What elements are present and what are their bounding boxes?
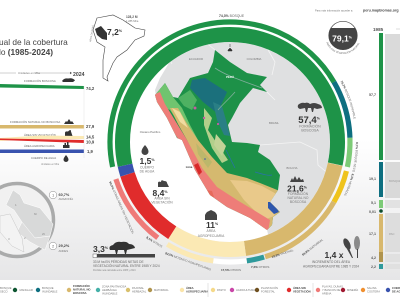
stat: bare area: VEGETACIÓN: [151, 200, 173, 204]
ring labels: 59,8% MATORRAL: [301, 238, 324, 257]
callout: andes: [49, 242, 70, 253]
callout: amazonia: AMAZONÍA: [58, 197, 73, 201]
ring labels: 90,0% OTRAS ÁREAS SIN VEGETACIÓN: [108, 180, 136, 234]
legend: BOSCOSA: [73, 291, 87, 295]
stat: forest formation: %: [317, 116, 321, 120]
legend: ZONA PANTANOSA: [102, 284, 126, 288]
ring labels: [108, 14, 358, 272]
title: [0, 37, 68, 57]
legend: INUNDABLE: [42, 290, 58, 294]
left line chart: [0, 71, 95, 166]
link note: peru.mapbiomas.org: [363, 8, 399, 12]
legend: PLAYAS, DUNAS: [322, 284, 343, 288]
callout: andes: 2: [52, 244, 55, 248]
stat: forest formation: BOSCOSA: [301, 128, 319, 132]
map of Peru: BRASIL: [269, 121, 279, 125]
South America locator map: ÁREA DE PERÚ: [89, 25, 95, 42]
stacked bar 1985: 4,2: [371, 256, 376, 260]
link note: Para más información acceder a:: [315, 8, 353, 12]
stacked bar 1985: [369, 27, 400, 269]
icon: water: [64, 155, 68, 162]
left line chart: FORMACIÓN BOSCOSA: [24, 78, 56, 83]
stat: agriculture: ÁREA: [207, 229, 216, 233]
legend: NATURAL NO: [73, 288, 91, 292]
South America locator map: [89, 15, 145, 81]
stacked bar 1985: 2,2: [371, 265, 376, 269]
callout: vegetation loss: 33 M ha EN PÉRDIDAS NETAS DE: [93, 259, 144, 264]
South America locator map: 128,2 M: [126, 15, 138, 19]
icon: wheat: [342, 236, 360, 258]
left line chart: 10,9: [86, 140, 95, 144]
legend: VEGETACIÓN: [293, 288, 311, 294]
stacked bar 1985: 19,1: [369, 177, 376, 181]
left line chart: Unidades en Mha: [41, 164, 60, 166]
ring labels: 17,5% OTROS: [221, 268, 241, 272]
legend: PASTO: [217, 288, 226, 292]
stacked bar 1985: 0,01: [369, 210, 376, 214]
ring labels: 82,5% MOSAICO AGROPECUARIO: [165, 251, 212, 272]
stat: non-forest natural formation: 21,6: [287, 184, 304, 194]
stat: agriculture: AGROPECUARIA: [198, 234, 225, 238]
left line chart: CUERPO DE AGUA: [31, 156, 56, 160]
callout: andes: ANDES: [58, 249, 68, 253]
callout: vegetation loss: VEGETACIÓN NATURAL ENTRE 1985 Y 2024: [93, 263, 160, 268]
ring: inner coverage: [82, 0, 378, 290]
stat: water: CUERPO: [140, 166, 154, 170]
map of Peru: Lima: [186, 165, 193, 169]
legend: SALINA: [367, 286, 377, 290]
callout: vegetation loss: %: [105, 246, 109, 250]
legend: [0, 280, 400, 300]
stat: water: %: [151, 158, 155, 162]
ring labels: 19,8% PAJONAL: [271, 248, 294, 259]
panel: regions circle: 2: [24, 236, 26, 240]
link note: [315, 8, 399, 12]
legend: ÁREA: [186, 285, 194, 290]
legend: MANGLAR: [20, 288, 33, 292]
South America locator map: 7,2: [107, 27, 119, 37]
stacked bar 1985: PAC: [389, 232, 395, 236]
legend: ÁREA SIN: [293, 285, 306, 290]
stat: forest formation: 57,4: [298, 115, 317, 126]
stacked bar 1985: 1985: [373, 27, 384, 32]
stat: water: [140, 145, 155, 174]
callout: vegetation loss: [93, 242, 160, 272]
callout: agriculture growth: INCREMENTO DEL ÁREA: [312, 260, 351, 264]
panel: regions circle: 60: [34, 213, 37, 216]
stacked bar 1985: 17,1: [369, 232, 376, 236]
legend: MINERÍA: [347, 288, 358, 292]
South America locator map: %: [119, 29, 123, 33]
badge: natural vegetation: [326, 21, 360, 54]
stat: non-forest natural formation: NATURAL NO: [288, 196, 309, 200]
legend: FORESTAL: [261, 290, 275, 294]
map of Peru: PERÚ: [226, 74, 234, 79]
legend: BOSQUE: [42, 286, 54, 290]
ring labels: 8,1% OTROS: [145, 235, 163, 249]
badge: natural vegetation: ÁREA CON VEGETACIÓN NATURAL: [326, 42, 360, 54]
icon: trees: [298, 103, 322, 112]
legend: MATORRAL: [154, 288, 169, 292]
stat: non-forest natural formation: [287, 176, 309, 204]
map of Peru: Océano Pacífico: [140, 130, 161, 134]
callout: agriculture growth: AGROPECUARIA ENTRE 1985 Y 2024: [303, 264, 359, 268]
stat: bare area: [151, 180, 173, 204]
callout: amazonia: [49, 191, 73, 201]
panel: regions circle: 3: [8, 237, 10, 241]
legend: INUNDABLE: [102, 292, 118, 296]
map of Peru: ECUADOR: [189, 57, 203, 61]
stat: water: DE AGUA: [140, 170, 155, 174]
legend: ARENA: [322, 292, 331, 296]
stat: non-forest natural formation: %: [304, 186, 308, 190]
left line chart: FORMACIÓN NATURAL NO BOSCOSA: [10, 119, 60, 124]
icon: trees: [109, 242, 135, 254]
legend: PLANTACIÓN: [261, 285, 278, 290]
callout: vegetation loss: 3,3: [93, 244, 105, 254]
legend: AGRICULTURA: [236, 288, 255, 292]
icon: north arrow: [228, 44, 232, 51]
map of Peru: COLOMBIA: [247, 57, 262, 61]
stat: forest formation: [298, 103, 322, 132]
callout: agriculture growth: 1,4 x: [325, 250, 344, 260]
left line chart: 27,9: [86, 124, 95, 129]
left line chart: 1,9: [87, 149, 93, 154]
icon: water drop: [142, 145, 148, 155]
pink agri dots: [194, 106, 196, 110]
panel: regions circle: 29: [42, 233, 45, 236]
stat: forest formation: FORMACIÓN: [299, 124, 321, 128]
ring labels: 7,2% OTROS: [251, 265, 269, 269]
ring labels: 6,3% HERBAZAL: [344, 174, 354, 196]
stat: water: 1,5: [140, 156, 151, 166]
stat: bare area: %: [164, 190, 168, 194]
legend: BOSQUE: [0, 286, 12, 290]
legend: COSTERA: [367, 290, 380, 294]
stat: bare area: ÁREA SIN: [154, 196, 170, 200]
north andes light green: [155, 83, 198, 142]
title: ual de la cobertura: [0, 37, 68, 47]
map of Peru: [140, 42, 330, 242]
left line chart: 14,5: [86, 134, 95, 140]
legend: FORMACIÓN: [73, 283, 90, 288]
stat: agriculture: %: [215, 222, 219, 226]
callout: vegetation loss: Pérdida neta calculada entre 1985 y 2024: [93, 269, 136, 272]
stat: bare area: 8,4: [153, 188, 164, 198]
legend: SECO: [0, 290, 8, 294]
title: lo (1985-2024): [0, 47, 53, 57]
callout: andes: 29,2%: [58, 244, 70, 248]
left line chart: 2024: [73, 72, 85, 78]
stat: non-forest natural formation: BOSCOSA: [290, 200, 307, 204]
icon: bare land: [158, 180, 169, 187]
andes tan: [170, 108, 282, 235]
legend: AGROPECUARIA: [186, 290, 208, 294]
stacked bar 1985: 5,1: [371, 201, 376, 205]
stat: non-forest natural formation: FORMACIÓN: [288, 191, 309, 196]
legend: Y BANCOS DE: [322, 288, 341, 292]
coast salmon: [153, 92, 270, 232]
callout: amazonia: 1: [52, 192, 55, 198]
teal flooded forest: [190, 78, 227, 113]
callout: amazonia: 60,7%: [58, 193, 70, 197]
icon: agriculture: [205, 210, 217, 220]
left line chart: ÁREA AGROPECUARIA: [24, 144, 55, 148]
map of Peru: BOLIVIA: [287, 166, 298, 170]
icon: grassland: [64, 119, 74, 124]
ring labels: 74,3% BOSQUE: [219, 14, 245, 18]
left line chart: ÁREA SIN VEGETACIÓN: [24, 132, 56, 137]
badge: natural vegetation: 79,1: [332, 34, 349, 44]
stat: agriculture: 11: [206, 220, 215, 230]
left line chart: 74,2: [86, 86, 95, 91]
stat: agriculture: [198, 210, 225, 238]
icon: bare land: [65, 130, 72, 136]
ring labels: 8,7% BOSQUE SECO: [352, 142, 358, 172]
legend: HERBÁCEA: [102, 288, 117, 292]
ring labels: 78,3% BOSQUE INUNDABLE: [340, 80, 356, 120]
callout: agriculture growth: [303, 236, 360, 268]
South America locator map: 1 285 Mha: [126, 19, 139, 23]
legend: PAJONAL: [132, 286, 145, 290]
panel: regions circle: [0, 184, 73, 256]
icon: grass: [290, 176, 304, 182]
icon: agriculture: [63, 142, 70, 148]
icon: forest: [62, 78, 75, 82]
panel: regions circle: 1: [15, 203, 17, 207]
legend: HERBAZAL: [132, 290, 147, 294]
stacked bar 1985: 57,7: [369, 93, 376, 97]
left line chart: Unidades en Mha: [18, 71, 40, 75]
badge: natural vegetation: %: [349, 36, 353, 40]
